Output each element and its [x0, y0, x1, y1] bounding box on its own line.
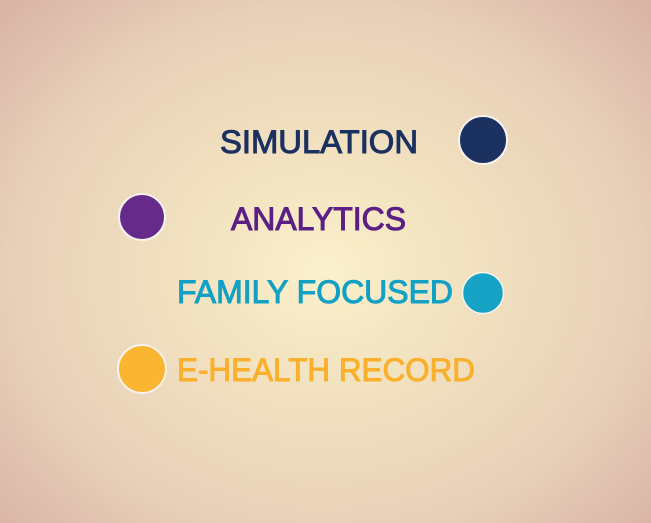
label: family focused: FAMILY FOCUSED: [177, 274, 453, 310]
label: analytics: ANALYTICS: [231, 201, 406, 237]
item: analytics: [119, 194, 406, 240]
dot: yellow: [118, 345, 166, 393]
item: family focused: [177, 272, 504, 314]
item: e-health record: [118, 345, 475, 393]
dot: teal: [462, 272, 504, 314]
label: simulation: SIMULATION: [220, 124, 418, 160]
item: simulation: [220, 116, 507, 164]
dot: navy: [459, 116, 507, 164]
dot: purple: [119, 194, 165, 240]
label: e-health record: E-HEALTH RECORD: [177, 352, 475, 388]
